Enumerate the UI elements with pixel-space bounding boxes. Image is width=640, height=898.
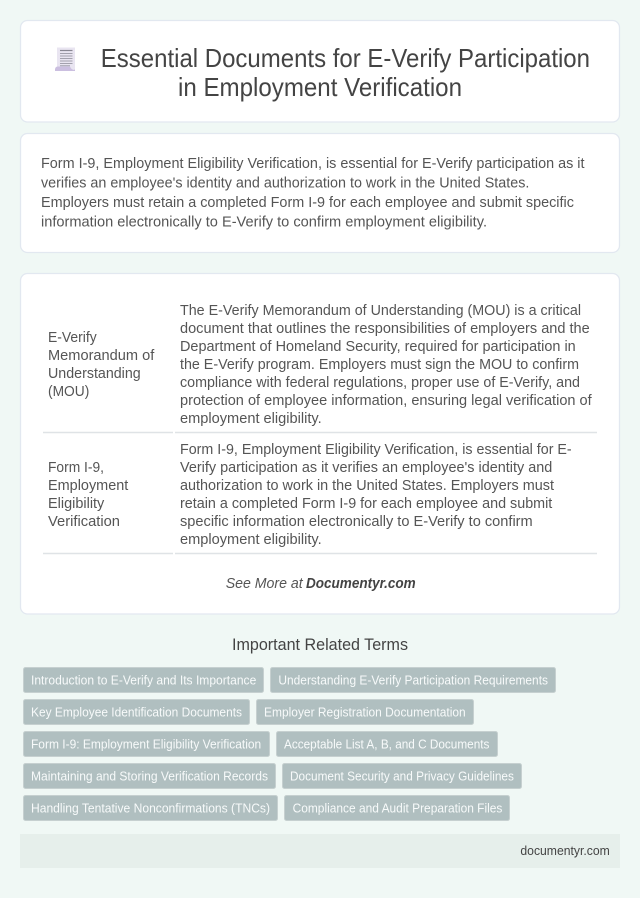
text block: summary paragraph: information electronically to E-Verify to confirm employment eligibility. (41, 214, 487, 230)
row label: Form I-9: Form I-9, (48, 460, 104, 476)
row label: Form I-9: Verification (48, 514, 120, 530)
tag (24, 700, 250, 724)
row label: MOU: Understanding (48, 366, 141, 382)
row text: Form I-9 description: employment eligibility. (180, 532, 322, 548)
tag (24, 732, 270, 756)
tag: Compliance and Audit Preparation Files (293, 801, 502, 815)
row text: Form I-9 description (180, 442, 572, 548)
tag (282, 764, 522, 788)
tag: Introduction to E-Verify and Its Importance (31, 673, 256, 687)
row label: Form I-9 (48, 460, 128, 530)
tag (24, 668, 264, 692)
row text: Form I-9 description: specific information electronically to E-Verify to confirm (180, 514, 533, 530)
tag (24, 764, 276, 788)
row text: Form I-9 description: authorization to work in the United States. Employers must (180, 478, 554, 494)
tag: Maintaining and Storing Verification Records (31, 769, 268, 783)
tag: Employer Registration Documentation (264, 705, 466, 719)
panel: header (20, 20, 620, 122)
row text: MOU description: protection of employee information, ensuring legal verification of (180, 393, 592, 409)
row text: MOU description: The E-Verify Memorandum of Understanding (MOU) is a critical (180, 303, 581, 319)
row text: MOU description: compliance with federal regulations, proper use of E-Verify, and (180, 375, 580, 391)
row text: MOU description: the E-Verify program. Employers must sign the MOU to confirm (180, 357, 579, 373)
tag (270, 668, 556, 692)
row text: Form I-9 description: retain a completed Form I-9 for each employee and submit (180, 496, 552, 512)
footer: documentyr.com (520, 844, 610, 858)
row label: MOU (48, 330, 154, 400)
row text: MOU description: document that outlines the responsibilities of employers and the (180, 321, 590, 337)
panel: documents table (20, 274, 620, 614)
text block: summary paragraph: Employers must retain a completed Form I-9 for each employee and submit specific (41, 194, 574, 211)
text block: summary paragraph (41, 155, 585, 230)
tag: Understanding E-Verify Participation Requirements (278, 673, 548, 687)
row text: MOU description (180, 303, 592, 427)
tag: Handling Tentative Nonconfirmations (TNCs) (31, 801, 270, 815)
icon: document scroll (55, 48, 75, 71)
see more link: See More at (226, 576, 304, 592)
tag (24, 796, 278, 820)
tag (276, 732, 498, 756)
row label: MOU: (MOU) (48, 384, 89, 400)
tag: Form I-9: Employment Eligibility Verification (31, 737, 261, 751)
see more link: Documentyr.com (306, 576, 416, 592)
text block: summary paragraph: verifies an employee's identity and authorization to work in the United States. (41, 174, 529, 192)
row text: Form I-9 description: Form I-9, Employment Eligibility Verification, is essential for E- (180, 442, 572, 458)
table row: Form I-9 (48, 442, 572, 548)
tag: Acceptable List A, B, and C Documents (284, 737, 489, 751)
row label: Form I-9: Employment (48, 478, 128, 494)
panel: related terms tags (24, 668, 556, 820)
tag: Document Security and Privacy Guidelines (290, 769, 514, 783)
text block: summary paragraph: Form I-9, Employment Eligibility Verification, is essential for E-Verify participation as it (41, 155, 585, 172)
row label: MOU: Memorandum of (48, 348, 154, 364)
footer (20, 834, 620, 868)
see more link (226, 576, 416, 592)
heading: important related terms: Important Related Terms (232, 635, 408, 654)
panel: summary (20, 134, 620, 252)
tag (256, 700, 474, 724)
table row: E-Verify MOU (48, 303, 592, 427)
tag: Key Employee Identification Documents (31, 705, 242, 719)
row label: Form I-9: Eligibility (48, 496, 105, 512)
row label: MOU: E-Verify (48, 330, 98, 346)
title: Essential Documents for E-Verify Participation (101, 43, 590, 73)
row text: Form I-9 description: Verify participation as it verifies an employee's identity and (180, 460, 552, 476)
tag (284, 796, 510, 820)
row text: MOU description: employment eligibility. (180, 411, 322, 427)
row text: MOU description: Department of Homeland Security, required for participation in (180, 339, 576, 355)
title (101, 43, 590, 102)
title: in Employment Verification (178, 72, 462, 102)
